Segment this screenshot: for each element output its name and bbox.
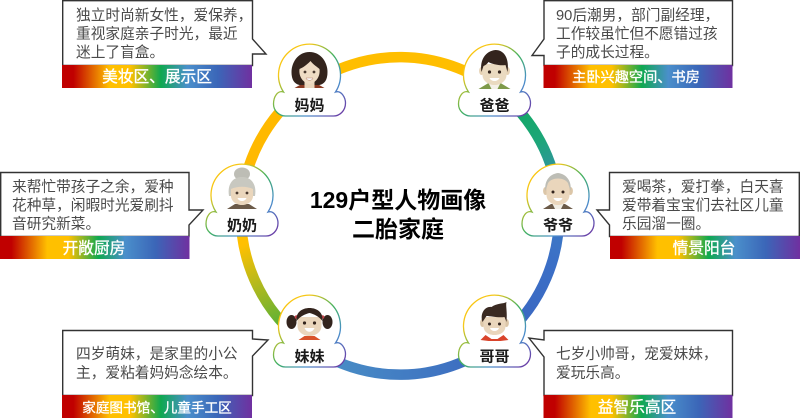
icon: father avatar <box>478 50 510 89</box>
callout: brother: 益智乐高区 <box>598 394 676 418</box>
callout: mother: 重视家庭亲子时光，最近 <box>76 22 238 44</box>
icon: grandmother avatar <box>227 168 257 209</box>
callout: grandmother: 花种草，闲暇时光爱刷抖 <box>12 194 174 215</box>
icon: sister avatar <box>286 308 332 340</box>
node: sister: 妹妹 <box>294 346 325 366</box>
title: 129户型人物画像 <box>310 181 486 215</box>
callout: sister: 主，爱粘着妈妈念绘本。 <box>76 362 238 382</box>
icon: brother avatar <box>480 302 509 341</box>
callout: mother: 迷上了盲盒。 <box>76 41 164 62</box>
callout: mother: 独立时尚新女性，爱保养， <box>76 4 252 25</box>
callout: grandmother <box>0 172 203 259</box>
icon: grandfather avatar <box>543 173 573 209</box>
node: father <box>458 44 530 116</box>
node: grandfather <box>522 164 594 236</box>
callout: grandfather <box>597 172 800 259</box>
callout: mother: 美妆区、展示区 <box>102 64 212 87</box>
callout: mother <box>62 1 266 88</box>
callout: brother <box>529 330 732 418</box>
callout: grandfather: 爱喝茶，爱打拳，白天喜 <box>622 176 784 196</box>
node: mother: 妈妈 <box>294 94 325 116</box>
callout: brother: 爱玩乐高。 <box>556 362 629 382</box>
node: sister <box>274 295 346 367</box>
callout: grandmother: 开敞厨房 <box>63 236 125 258</box>
callout: brother: 七岁小帅哥，宠爱妹妹， <box>556 342 718 364</box>
node: brother: 哥哥 <box>479 346 510 366</box>
callout: grandfather: 乐园溜一圈。 <box>622 212 710 234</box>
callout: grandfather: 情景阳台 <box>673 236 735 258</box>
title <box>310 181 486 244</box>
node: grandmother: 奶奶 <box>227 214 257 236</box>
callout: grandfather: 爱带着宝宝们去社区儿童 <box>622 194 784 215</box>
callout: sister: 四岁萌妹，是家里的小公 <box>76 342 238 364</box>
callout: sister: 家庭图书馆、儿童手工区 <box>82 396 232 416</box>
callout: father: 子的成长过程。 <box>556 41 659 62</box>
callout: grandmother: 音研究新菜。 <box>12 212 100 234</box>
callout: father: 主卧兴趣空间、书房 <box>572 67 700 87</box>
node: mother <box>274 44 346 116</box>
title: 二胎家庭 <box>352 210 444 244</box>
node: grandmother <box>206 164 278 236</box>
callout: father: 工作较虽忙但不愿错过孩 <box>556 22 718 44</box>
icon: mother avatar <box>292 52 328 88</box>
node: father: 爸爸 <box>479 94 510 116</box>
ring: family circle <box>241 57 559 375</box>
node: brother <box>458 295 530 367</box>
callout: father <box>532 1 732 88</box>
node: grandfather: 爷爷 <box>543 214 573 236</box>
callout: grandmother: 来帮忙带孩子之余，爱种 <box>12 176 174 196</box>
callout: father: 90后潮男，部门副经理， <box>556 4 719 25</box>
callout: sister <box>62 330 268 418</box>
